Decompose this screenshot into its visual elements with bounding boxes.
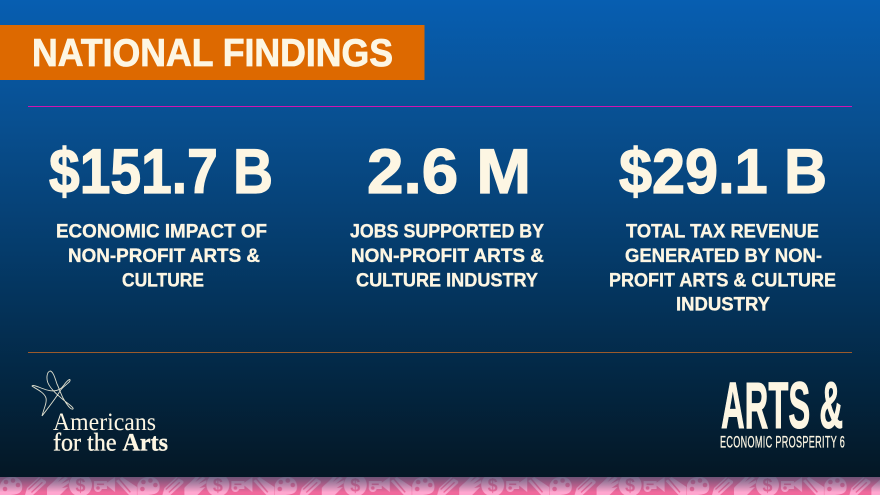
text: economic impact description: CULTURE <box>122 270 204 291</box>
text: economic impact description: NON-PROFIT ARTS & <box>68 246 260 267</box>
text: tax revenue description: GENERATED BY NON- <box>625 246 822 267</box>
text: Americans: Americans <box>53 409 156 436</box>
text: jobs description <box>350 222 544 291</box>
text: jobs description: CULTURE INDUSTRY <box>356 270 538 291</box>
text: tax revenue description <box>609 222 836 316</box>
stat: tax revenue <box>609 137 836 316</box>
number: $151.7 B: $151.7 B <box>49 137 273 207</box>
stat: economic impact <box>49 137 273 291</box>
text: tax revenue description: TOTAL TAX REVENUE <box>626 222 819 242</box>
text: for the Arts: for the Arts <box>53 430 168 456</box>
text: economic impact description: ECONOMIC IMPACT OF <box>56 222 267 242</box>
icon: star <box>32 371 73 416</box>
text: jobs description: JOBS SUPPORTED BY <box>350 222 544 242</box>
stat: jobs supported <box>350 137 544 291</box>
text: tax revenue description: PROFIT ARTS & CULTURE <box>609 270 836 291</box>
text: jobs description: NON-PROFIT ARTS & <box>351 246 544 267</box>
text: economic impact description <box>56 222 267 291</box>
number: $29.1 B: $29.1 B <box>619 137 827 207</box>
decorative arts icon strip <box>0 477 880 495</box>
logo: Arts & Economic Prosperity 6 <box>720 368 845 451</box>
text: Economic Prosperity 6: ECONOMIC PROSPERITY 6 <box>720 433 845 451</box>
number: 2.6 M: 2.6 M <box>367 137 531 207</box>
text: tax revenue description: INDUSTRY <box>676 295 770 316</box>
logo: Americans for the Arts <box>32 371 168 456</box>
heading: national findings: NATIONAL FINDINGS <box>32 32 393 75</box>
